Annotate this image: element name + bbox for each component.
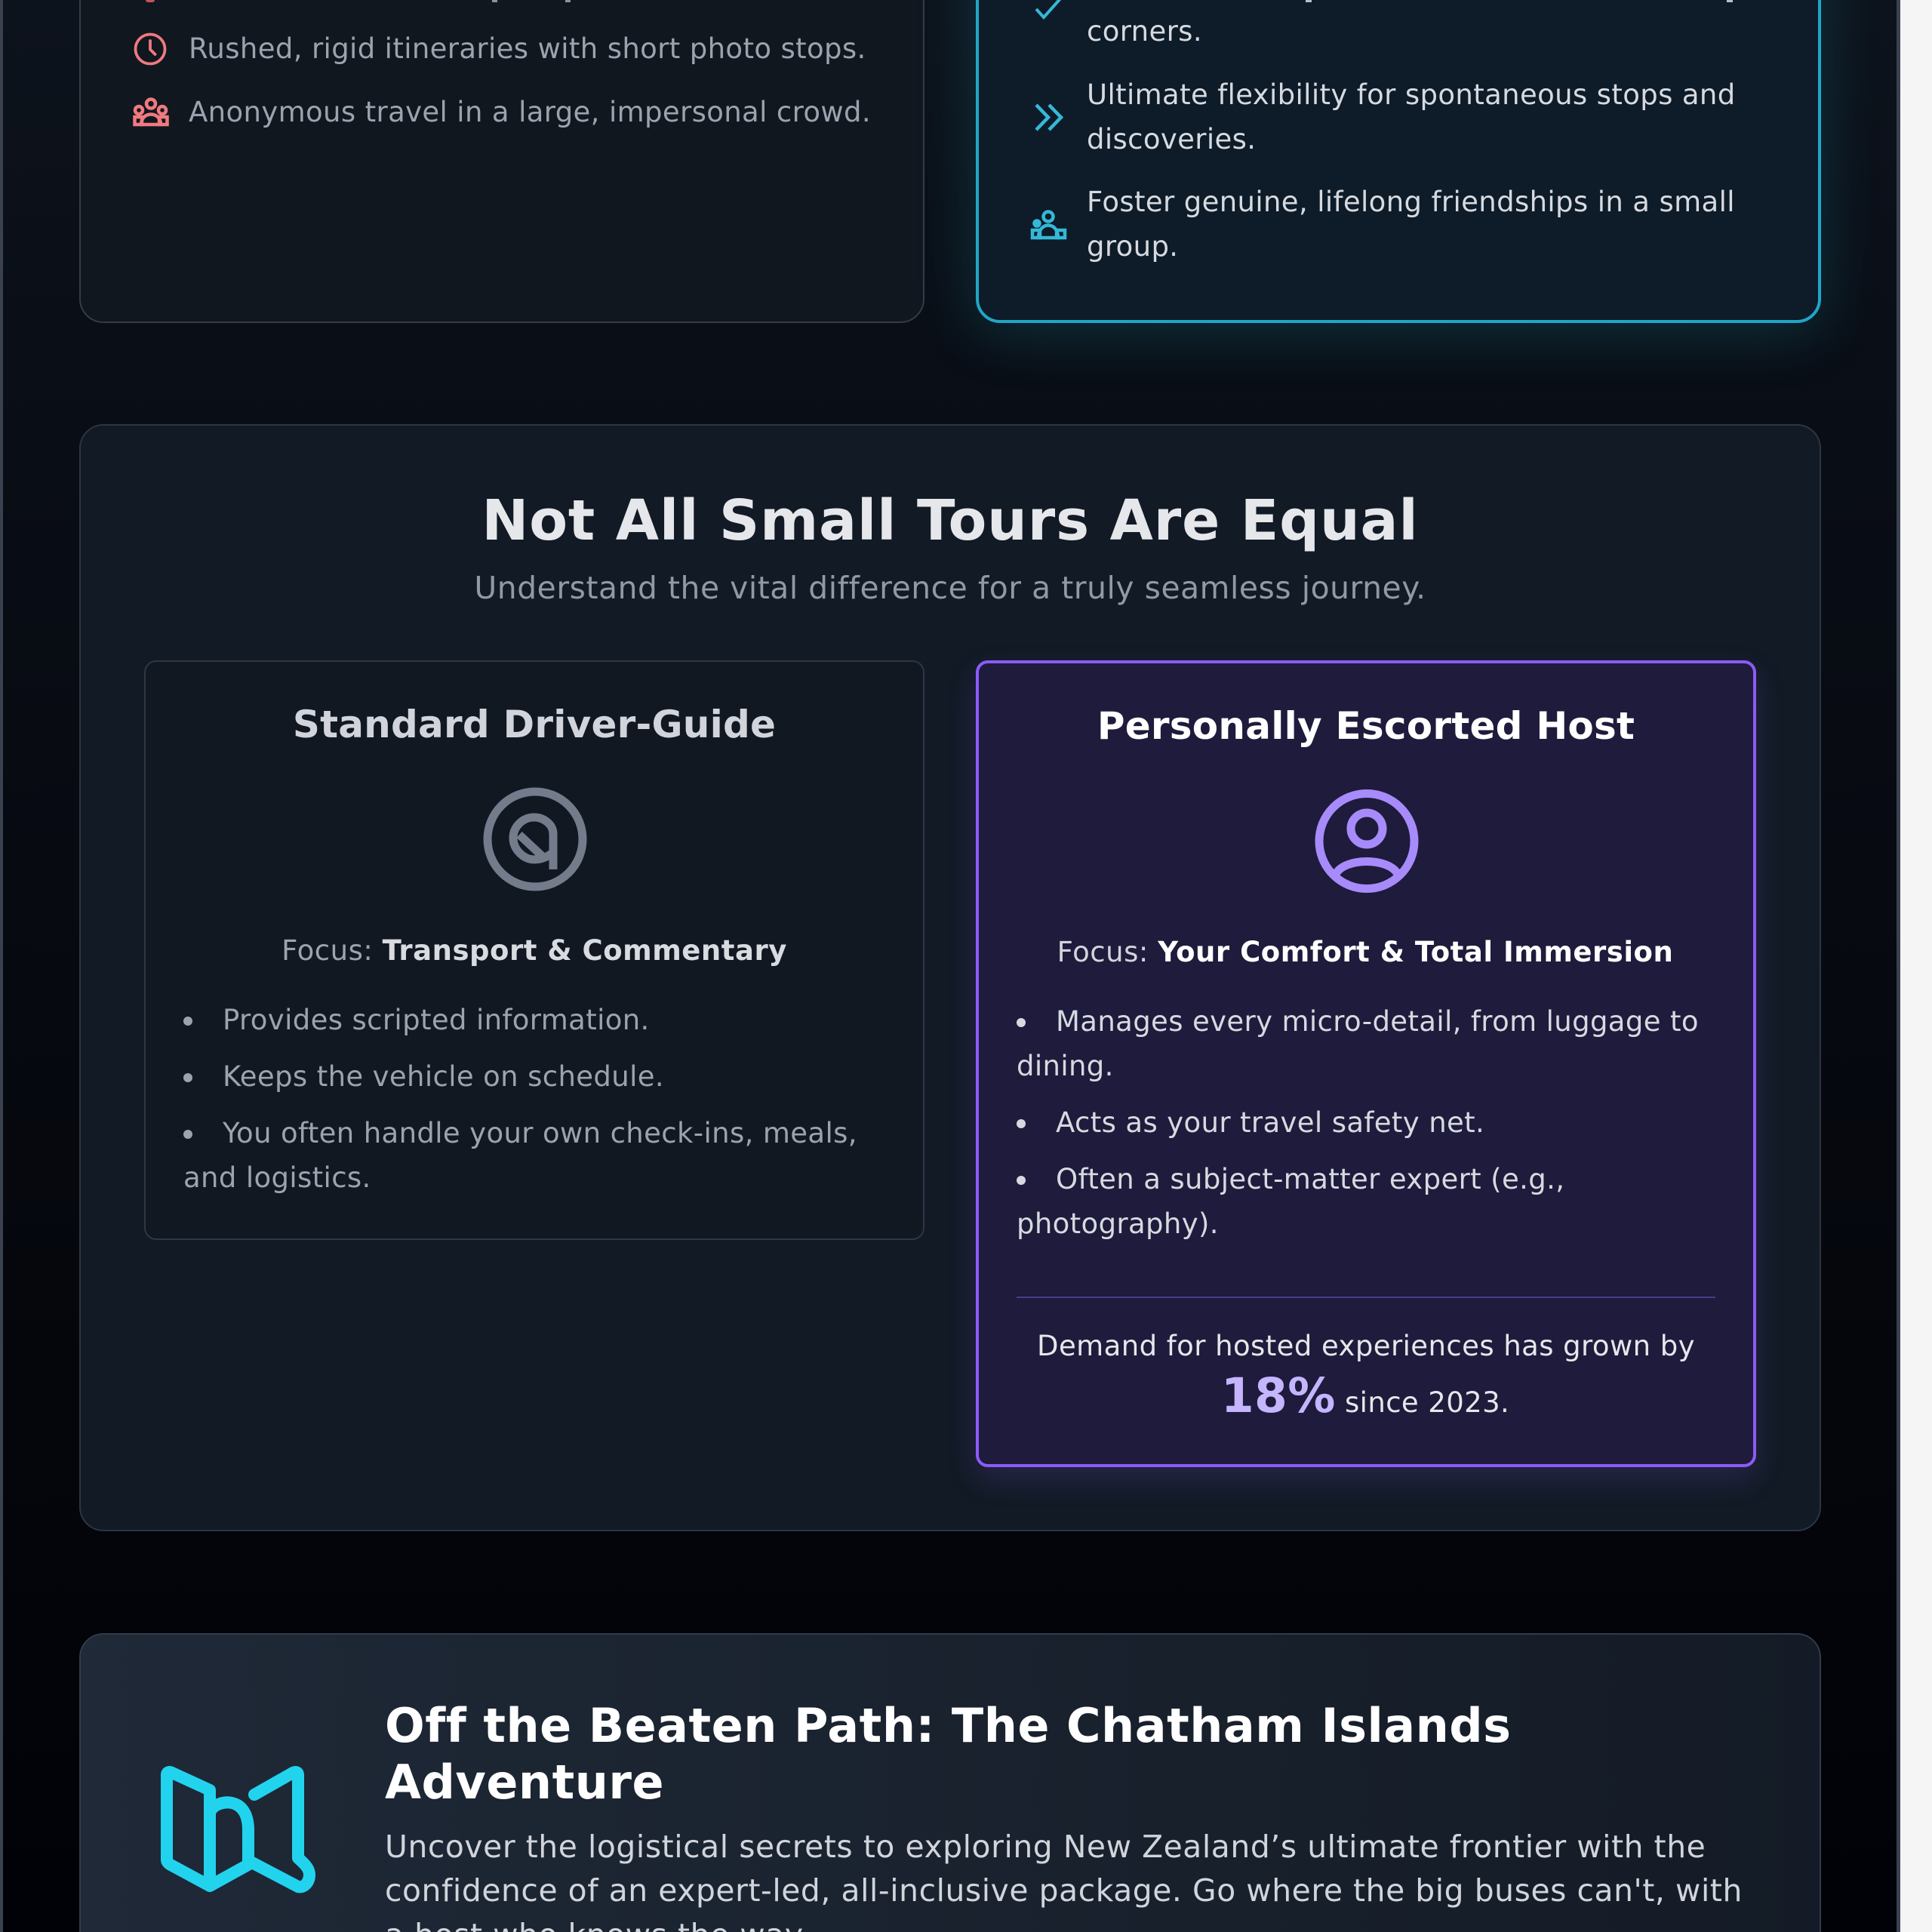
- paragraph: chatham: confidence of an expert-led, all-inclusive package. Go where the big buses can't, with: [385, 1872, 1743, 1909]
- stat text: Demand for hosted experiences has grown by: [1037, 1330, 1695, 1362]
- text: friendships: Foster genuine, lifelong friendships in a small: [1087, 186, 1735, 218]
- bullet 1: Manages every micro-detail, from luggage to: [1056, 1005, 1699, 1038]
- text: corners: corners.: [1087, 15, 1202, 48]
- text: friendships: group.: [1087, 230, 1178, 263]
- icon: crowd: [133, 97, 169, 127]
- list: driver-guide: [183, 1004, 857, 1194]
- bullet 3: photography).: [1017, 1208, 1219, 1240]
- text: rushed itineraries: Rushed, rigid itineraries with short photo stops.: [189, 32, 866, 65]
- focus line: Focus: Transport & Commentary: [281, 934, 787, 967]
- panel: not all small tours are equal: [79, 424, 1821, 1531]
- heading: chatham: [385, 1698, 1512, 1810]
- bullet 3: and logistics.: [183, 1161, 371, 1194]
- text fragment: clipped descenders: [492, 0, 571, 2]
- bullet 3: You often handle your own check-ins, meals,: [223, 1117, 857, 1149]
- bullet 2: Keeps the vehicle on schedule.: [223, 1060, 664, 1093]
- bullet 1: dining.: [1017, 1050, 1114, 1082]
- heading: chatham: Off the Beaten Path: The Chatham Islands: [385, 1698, 1512, 1752]
- icon: chevrons: [1035, 103, 1063, 131]
- icon: friends: [1031, 210, 1067, 240]
- icon: user circle: [1315, 789, 1419, 893]
- bullet 3: [1017, 1158, 1564, 1247]
- card: standard driver-guide: [144, 660, 924, 1240]
- bullet 2: Acts as your travel safety net.: [1056, 1106, 1484, 1139]
- stat value: 18% since 2023.: [1221, 1368, 1509, 1423]
- bullet 1: Provides scripted information.: [223, 1004, 650, 1036]
- text: anonymous travel: Anonymous travel in a large, impersonal crowd.: [189, 96, 871, 128]
- text fragment: clipped descenders: [1306, 0, 1733, 2]
- text: flexibility: Ultimate flexibility for spontaneous stops and: [1087, 78, 1736, 111]
- card: personally escorted host: [976, 660, 1756, 1467]
- divider: [1017, 1297, 1715, 1298]
- heading: chatham: Adventure: [385, 1754, 664, 1810]
- bullet 1: [1017, 1000, 1699, 1089]
- list: host: [1017, 1005, 1699, 1240]
- icon: headset circle: [483, 788, 587, 891]
- panel: typical large tour: [79, 0, 924, 323]
- paragraph: chatham: Uncover the logistical secrets to exploring New Zealand’s ultimate frontier with the: [385, 1828, 1706, 1864]
- card heading: standard driver-guide: Standard Driver-Guide: [293, 703, 776, 746]
- text: friendships: [1087, 186, 1735, 263]
- icon: check: [1035, 0, 1061, 20]
- bullet 3: [183, 1112, 857, 1201]
- panel: chatham islands: [79, 1633, 1821, 1932]
- card heading: escorted host: Personally Escorted Host: [1097, 704, 1635, 748]
- heading: Not All Small Tours Are Equal: [481, 488, 1419, 553]
- icon: partial warning glyph: [146, 0, 155, 2]
- text: flexibility: [1087, 78, 1736, 155]
- bullet 3: Often a subject-matter expert (e.g.,: [1056, 1163, 1564, 1195]
- icon: clock: [134, 33, 166, 65]
- focus line: Focus: Your Comfort & Total Immersion: [1057, 936, 1673, 968]
- icon: map: [161, 1766, 315, 1893]
- subheading: Understand the vital difference for a truly seamless journey.: [474, 569, 1426, 605]
- text: flexibility: discoveries.: [1087, 123, 1256, 155]
- panel: small group tour: [976, 0, 1821, 323]
- paragraph: chatham: [385, 1828, 1743, 1932]
